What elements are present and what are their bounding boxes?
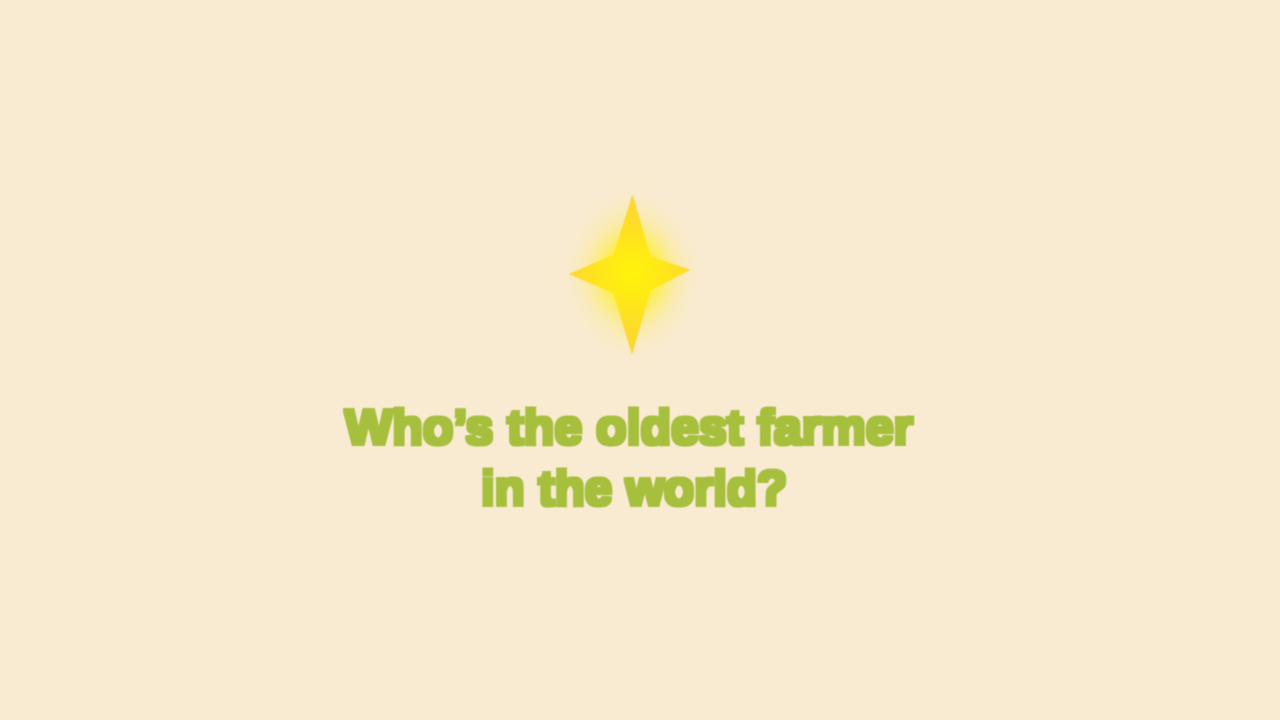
title: Who’s the oldest farmer: [345, 401, 913, 455]
icon: glowing four-point star: [560, 186, 704, 362]
title: in the world?: [481, 462, 787, 516]
title: [345, 401, 913, 516]
